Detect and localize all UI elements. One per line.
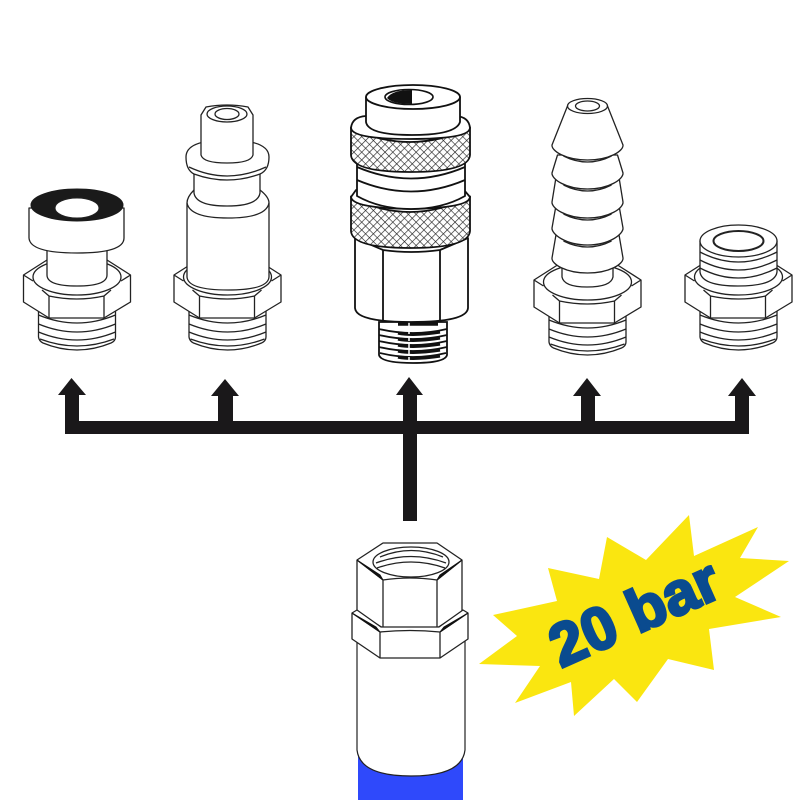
- badge: yellow starburst: [479, 515, 789, 716]
- connector 5: double threaded nipple: [685, 225, 792, 350]
- blue hose: [358, 752, 463, 800]
- connector 3: quick coupling: [351, 85, 470, 363]
- hose connector: [352, 543, 468, 800]
- black seal ring: [31, 189, 123, 221]
- connector 2: long nipple plug: [174, 105, 281, 350]
- connector 1: flat seal plug: [24, 189, 130, 350]
- top cap: [366, 97, 460, 135]
- middle collar: [357, 162, 465, 209]
- arrows: distribution manifold: [58, 377, 756, 521]
- upper hex nut: [357, 543, 462, 628]
- upper knurled ring: [351, 128, 470, 172]
- connector 4: hose barb: [534, 98, 641, 355]
- lower hex nut: [352, 610, 468, 658]
- badge text: 20 bar: [539, 546, 730, 680]
- lower knurled ring: [351, 197, 470, 248]
- hex body: [355, 238, 468, 322]
- sleeve: [357, 630, 465, 776]
- threaded end: [379, 322, 447, 363]
